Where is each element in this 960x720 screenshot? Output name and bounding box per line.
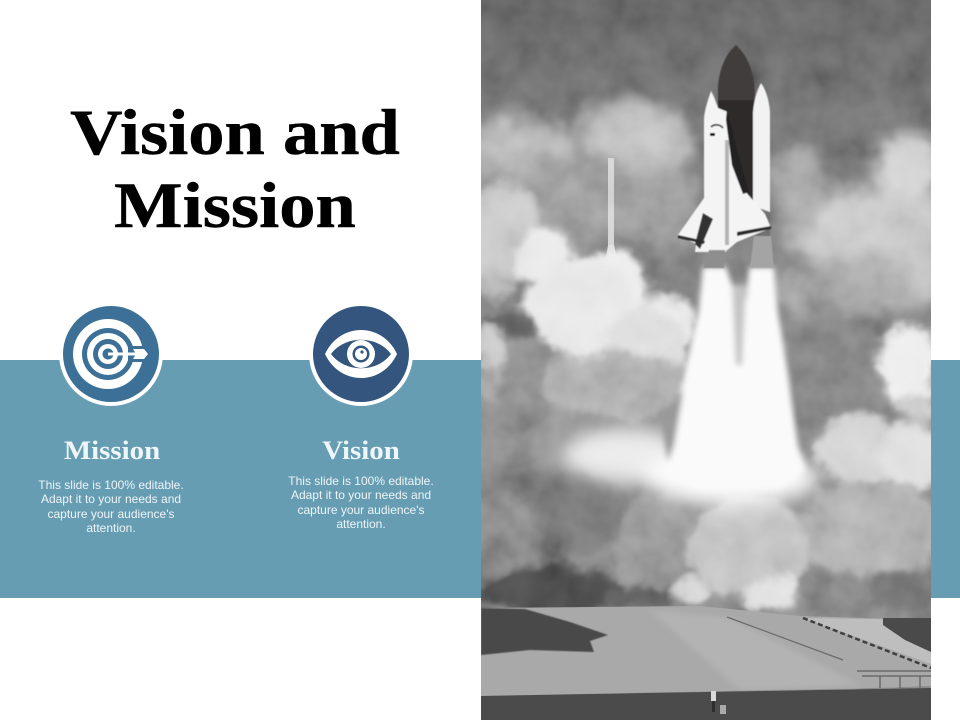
cloud texture overlay <box>481 100 931 612</box>
photo: shuttle launch <box>481 0 931 720</box>
right booster <box>753 83 770 212</box>
foreground ground <box>481 688 931 720</box>
pad structure at right <box>883 618 931 652</box>
icon: eye <box>309 306 413 406</box>
lower right clouds <box>800 325 955 610</box>
soft white glow around plume base <box>560 427 820 506</box>
teal background band <box>0 360 960 598</box>
heading: Vision: Vision <box>322 435 400 465</box>
text: Vision description: This slide is 100% editable. Adapt it to your needs and capture your audience's attention. <box>288 474 434 531</box>
sky <box>481 0 931 720</box>
icon: target with arrow <box>59 306 163 406</box>
shuttle <box>678 45 774 268</box>
title: Vision and <box>70 97 400 169</box>
dark lower smoke <box>460 467 812 614</box>
text: Mission description: This slide is 100% editable. Adapt it to your needs and capture your audience's attention. <box>38 478 184 535</box>
orbiter <box>678 91 771 252</box>
launch tower <box>606 158 617 258</box>
embankment shadow <box>481 608 608 655</box>
upper grey clouds <box>468 102 950 313</box>
heading: Mission: Mission <box>63 435 160 465</box>
person in foreground <box>711 691 726 714</box>
launch pad embankment <box>481 606 931 696</box>
railing at right <box>857 671 931 688</box>
exhaust plume <box>661 267 806 490</box>
title: Mission <box>114 170 356 242</box>
external tank <box>718 45 755 210</box>
left white billows <box>458 183 698 390</box>
title <box>70 97 400 242</box>
mid grey smoke and dark gap at left <box>470 311 687 453</box>
